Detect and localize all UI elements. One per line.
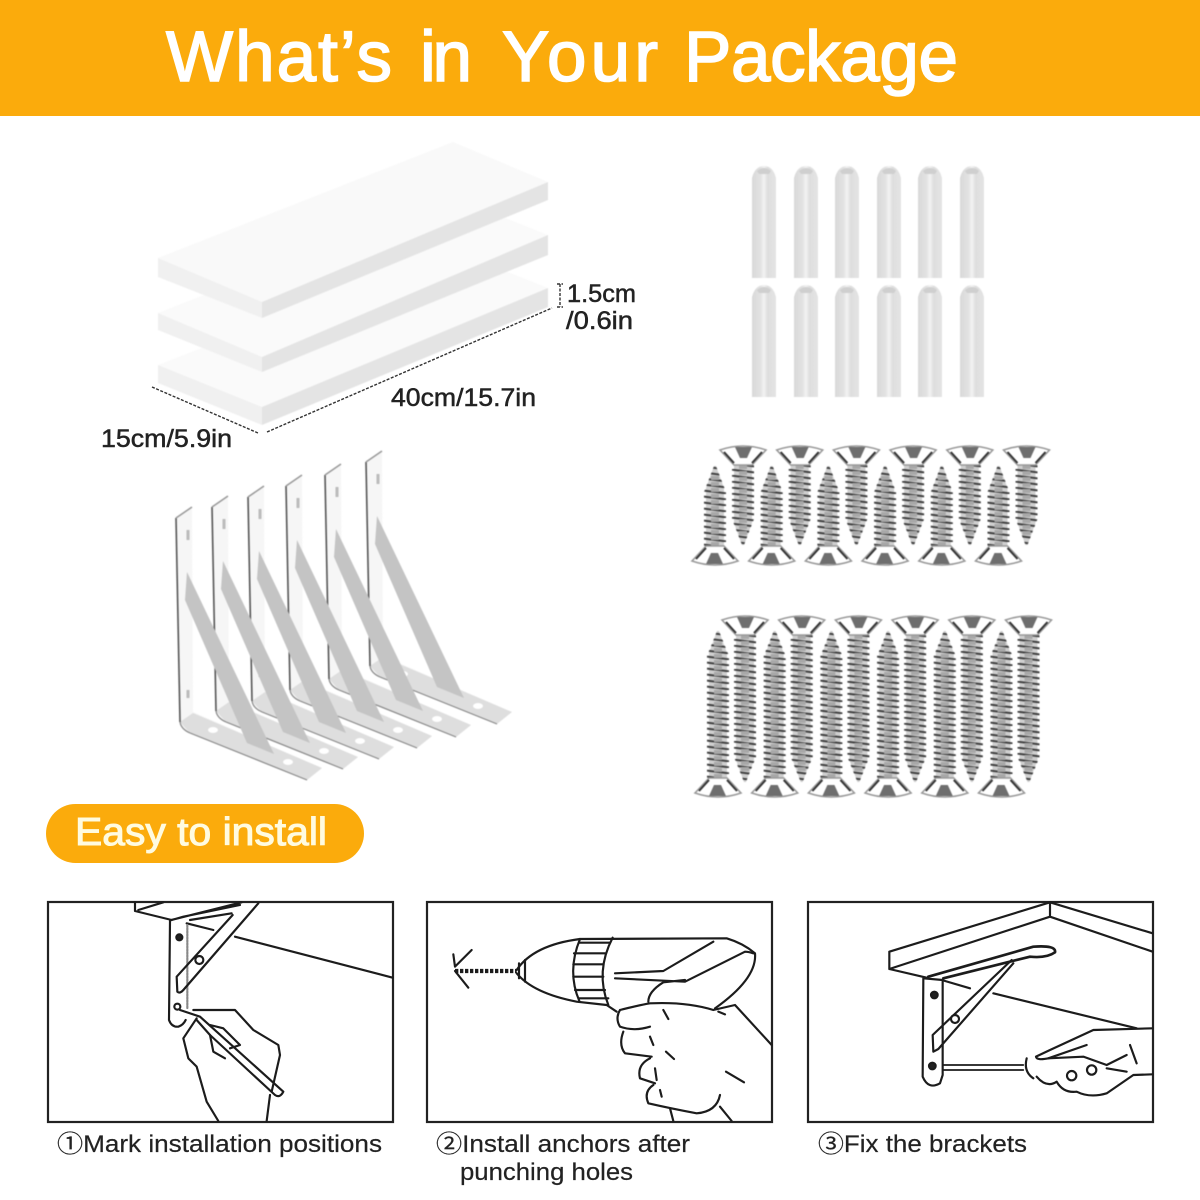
dimension: thickness: 1.5cm [567,280,636,308]
caption: step 2: punching holes [460,1159,633,1186]
caption: step 2: ②Install anchors after [436,1131,690,1158]
shelves with dimensions [101,142,636,453]
shelf: bottom [158,250,548,425]
title: Your [502,18,658,97]
long screws [695,616,1052,797]
panel: step 2 drill [427,902,772,1122]
dimension lines [152,284,563,433]
dimension: width: 15cm/5.9in [101,425,232,453]
caption: step 1: ①Mark installation positions [57,1131,382,1158]
dimension: length: 40cm/15.7in [391,384,536,412]
illustration: bracket fixed with screwdriver [889,902,1153,1095]
shelf: middle [158,197,548,372]
title: in [420,18,472,97]
panel: step 3 fix brackets [808,902,1153,1122]
caption: step 2 [436,1131,690,1186]
short screws [692,446,1050,565]
title: Package [684,18,958,97]
brackets [176,451,512,780]
panel: step 1 mark positions [48,902,393,1122]
title [166,18,958,97]
dimension: thickness inches: /0.6in [566,307,633,335]
badge: easy to install [46,804,364,863]
title: What’s [166,18,392,97]
title banner [0,0,1200,116]
caption: step 3: ③Fix the brackets [818,1131,1027,1158]
shelf: top [158,142,548,318]
badge: easy to install: Easy to install [75,811,327,854]
illustration: drill in hand [453,938,772,1121]
wall anchors [752,166,984,397]
illustration: bracket and hand with pencil [135,902,393,1121]
